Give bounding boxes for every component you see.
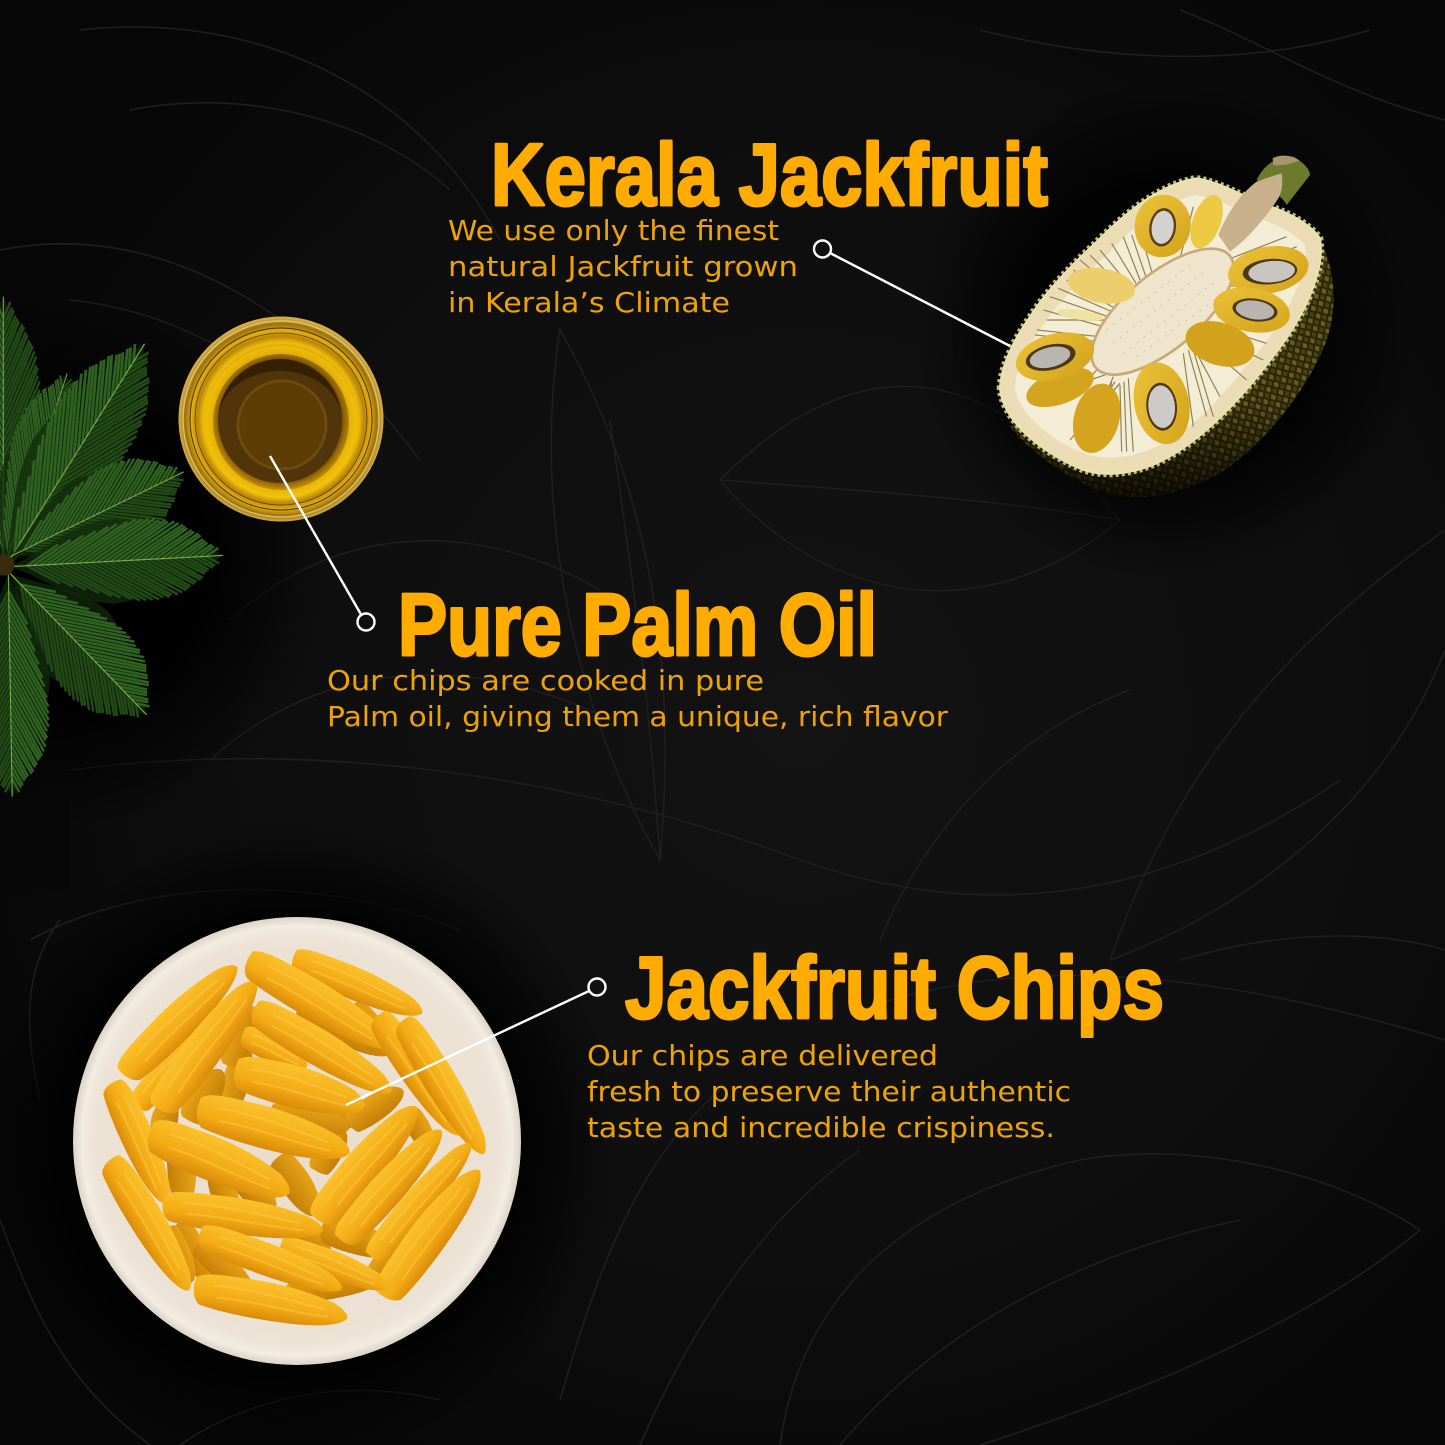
heading: Jackfruit Chips: Jackfruit Chips (625, 938, 1164, 1037)
text block: Jackfruit Chips description: taste and incredible crispiness. (587, 1112, 1055, 1144)
text block: Jackfruit Chips description: Our chips are delivered (587, 1040, 938, 1072)
core (1072, 227, 1254, 396)
illustration: bowl of palm oil (178, 316, 384, 522)
text block: Kerala Jackfruit description: We use only the finest (448, 215, 779, 247)
seeds (1023, 206, 1298, 432)
callout: Kerala Jackfruit connector (814, 240, 1010, 346)
plate (73, 917, 521, 1365)
callout: Pure Palm Oil connector (270, 456, 374, 630)
text block: Jackfruit Chips description (587, 1040, 1071, 1144)
illustration: palm fronds (0, 297, 225, 797)
text block: Jackfruit Chips description: fresh to preserve their authentic (587, 1076, 1071, 1108)
illustration: bowl of jackfruit chips (73, 917, 521, 1365)
stem (1257, 156, 1310, 205)
text block: Kerala Jackfruit description (448, 215, 798, 319)
fibrous stalk (1218, 173, 1282, 252)
heading: Kerala Jackfruit: Kerala Jackfruit (491, 125, 1048, 224)
chips (95, 944, 499, 1334)
illustration: halved jackfruit (1000, 156, 1334, 497)
text block: Pure Palm Oil description: Palm oil, giving them a unique, rich flavor (327, 701, 949, 733)
callout: Jackfruit Chips connector (346, 978, 606, 1105)
heading: Pure Palm Oil: Pure Palm Oil (398, 575, 877, 674)
cut face (1000, 178, 1321, 474)
text block: Pure Palm Oil description: Our chips are cooked in pure (327, 665, 764, 697)
text block: Kerala Jackfruit description: natural Jackfruit grown (448, 251, 798, 283)
text block: Kerala Jackfruit description: in Kerala’s Climate (448, 287, 730, 319)
fibres (1035, 207, 1300, 452)
fruit pods (1010, 190, 1312, 458)
text block: Pure Palm Oil description (327, 665, 949, 733)
rind back (1010, 230, 1334, 497)
